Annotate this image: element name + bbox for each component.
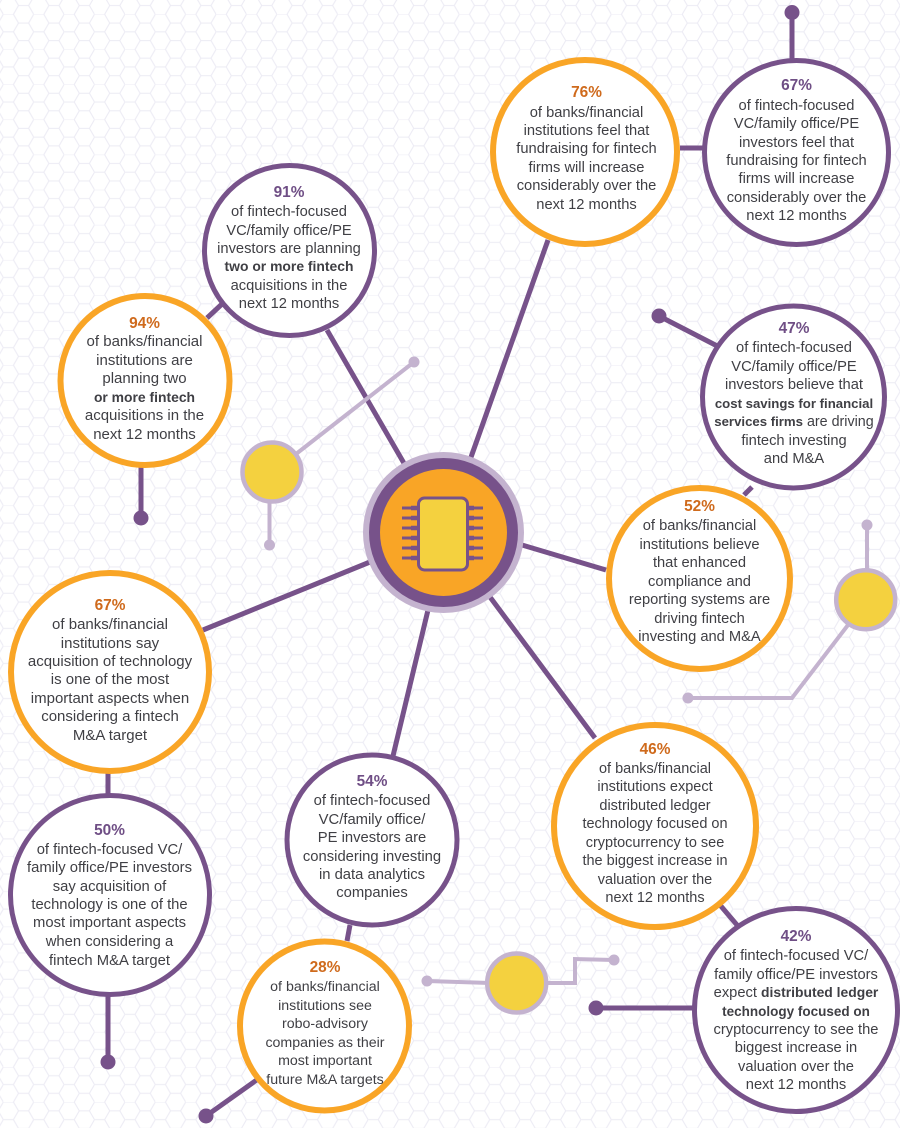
stat: 50% investors technology: 50% <box>94 822 125 839</box>
stat: 42% investors distributed ledger: cryptocurrency to see the <box>714 1022 878 1038</box>
stat: 76% banks fundraising: fundraising for fintech <box>516 141 657 157</box>
stat: 52% banks compliance <box>609 488 790 669</box>
stat: 28% banks robo-advisory: future M&A targets <box>266 1072 384 1088</box>
stat: 91% investors acquisitions: next 12 months <box>239 296 339 312</box>
stat: 50% investors technology: when considering a <box>45 934 174 950</box>
stat: 54% investors data analytics <box>287 755 457 925</box>
stat: 47% investors cost savings: fintech investing <box>741 433 847 449</box>
stat: 47% investors cost savings <box>702 306 884 488</box>
stat: 28% banks robo-advisory: of banks/financial <box>270 979 380 995</box>
stat: 67% banks technology <box>11 573 209 771</box>
stat: 52% banks compliance: 52% <box>684 498 715 515</box>
stat: 52% banks compliance: driving fintech <box>654 611 745 627</box>
stat: 67% investors fundraising: fundraising for fintech <box>726 153 867 169</box>
stat: 47% investors cost savings: VC/family office/PE <box>731 359 857 375</box>
stat: 67% investors fundraising: of fintech-focused <box>739 98 854 114</box>
stat: 67% investors fundraising: considerably over the <box>727 190 866 206</box>
stat: 50% investors technology: of fintech-focused VC/ <box>37 842 183 858</box>
stat: 46% banks distributed ledger: technology focused on <box>582 816 728 832</box>
stat: 50% investors technology: fintech M&A target <box>49 953 170 969</box>
yellow node: bottom <box>422 954 620 1012</box>
stat: 28% banks robo-advisory: companies as their <box>265 1035 385 1051</box>
stat: 50% investors technology: family office/PE investors <box>27 860 192 876</box>
stat: 67% banks technology: M&A target <box>73 727 148 744</box>
stat: 46% banks distributed ledger <box>554 725 756 927</box>
stat: 67% investors fundraising: VC/family office/PE <box>734 116 859 132</box>
stat: 28% banks robo-advisory: robo-advisory <box>282 1016 369 1032</box>
stat: 54% investors data analytics: VC/family office/ <box>319 812 426 828</box>
stat: 76% banks fundraising: considerably over the <box>517 178 656 194</box>
stat: 52% banks compliance: investing and M&A <box>638 629 761 645</box>
stat: 47% investors cost savings: and M&A <box>764 451 824 467</box>
stat: 76% banks fundraising <box>493 60 677 244</box>
stat: 42% investors distributed ledger: valuation over the <box>738 1059 854 1075</box>
stat: 91% investors acquisitions: of fintech-focused <box>231 204 347 220</box>
stat: 67% banks technology: 67% <box>95 597 126 614</box>
stat: 67% banks technology: of banks/financial <box>52 616 168 633</box>
stat: 42% investors distributed ledger: expect distributed ledger <box>714 984 879 1001</box>
stat: 50% investors technology: say acquisition of <box>53 879 167 895</box>
stat: 76% banks fundraising: 76% <box>571 84 602 101</box>
stat: 91% investors acquisitions <box>204 166 374 336</box>
yellow node: right <box>682 520 895 704</box>
stat: 42% investors distributed ledger: biggest increase in <box>735 1040 857 1056</box>
stat: 54% investors data analytics: PE investors are <box>318 830 426 846</box>
stat: 52% banks compliance: compliance and <box>648 574 751 590</box>
yellow node: left <box>242 356 420 550</box>
stat: 67% investors fundraising: investors feel that <box>739 135 854 151</box>
stat: 76% banks fundraising: institutions feel that <box>524 123 649 139</box>
stat: 47% investors cost savings: 47% <box>779 320 810 337</box>
stat: 46% banks distributed ledger: the biggest increase in <box>582 853 728 869</box>
stat: 94% banks acquisitions: acquisitions in the <box>85 407 204 424</box>
stat: 42% investors distributed ledger: next 12 months <box>746 1077 846 1093</box>
stat: 28% banks robo-advisory: most important <box>278 1053 372 1069</box>
stat: 67% banks technology: considering a fintech <box>41 708 179 725</box>
stat: 94% banks acquisitions: 94% <box>129 315 160 332</box>
stat: 52% banks compliance: of banks/financial <box>643 518 756 534</box>
stat: 54% investors data analytics: companies <box>336 885 408 901</box>
stat: 54% investors data analytics: considering investing <box>303 849 441 865</box>
stat: 47% investors cost savings: services firms are driving <box>714 414 874 430</box>
stat: 47% investors cost savings: of fintech-focused <box>736 340 852 356</box>
stat: 91% investors acquisitions: investors are planning <box>217 241 361 257</box>
stat: 94% banks acquisitions: next 12 months <box>93 426 196 443</box>
stat: 46% banks distributed ledger: cryptocurrency to see <box>586 835 724 851</box>
stat: 42% investors distributed ledger: technology focused on <box>722 1004 870 1019</box>
stat: 54% investors data analytics: of fintech-focused <box>314 793 430 809</box>
stat: 50% investors technology: technology is one of the <box>31 897 188 913</box>
stat: 67% investors fundraising: firms will increase <box>739 171 854 187</box>
stat: 94% banks acquisitions <box>60 296 230 465</box>
stat: 42% investors distributed ledger: of fintech-focused VC/ <box>724 948 869 964</box>
stat: 52% banks compliance: that enhanced <box>653 555 746 571</box>
stat: 94% banks acquisitions: or more fintech <box>94 389 195 405</box>
stat: 47% investors cost savings: cost savings for financial <box>715 396 873 411</box>
stat: 54% investors data analytics: 54% <box>357 773 388 790</box>
stat: 46% banks distributed ledger: institutions expect <box>597 779 713 795</box>
stat: 67% banks technology: acquisition of technology <box>28 653 193 670</box>
stat: 67% investors fundraising <box>704 60 888 244</box>
purple connector network <box>100 5 800 1124</box>
stat: 76% banks fundraising: next 12 months <box>536 197 637 213</box>
stat: 67% investors fundraising: 67% <box>781 77 812 94</box>
stat: 50% investors technology: most important aspects <box>33 915 186 931</box>
stat: 67% banks technology: important aspects when <box>31 690 189 707</box>
stat: 52% banks compliance: reporting systems are <box>629 592 770 608</box>
stat: 94% banks acquisitions: institutions are <box>96 352 193 369</box>
stat: 91% investors acquisitions: 91% <box>274 184 305 201</box>
stat: 42% investors distributed ledger: family office/PE investors <box>714 967 878 983</box>
stat: 46% banks distributed ledger: valuation over the <box>598 872 712 888</box>
stat: 46% banks distributed ledger: 46% <box>640 741 671 758</box>
stat: 28% banks robo-advisory: institutions see <box>278 998 372 1014</box>
stat: 67% banks technology: is one of the most <box>51 671 170 688</box>
stat: 94% banks acquisitions: planning two <box>102 370 187 387</box>
stat: 91% investors acquisitions: VC/family office/PE <box>226 223 352 239</box>
stat: 94% banks acquisitions: of banks/financial <box>87 333 202 350</box>
stat: 91% investors acquisitions: acquisitions in the <box>231 278 347 294</box>
stat: 28% banks robo-advisory: 28% <box>310 959 341 976</box>
stat: 46% banks distributed ledger: next 12 months <box>605 890 705 906</box>
stat: 52% banks compliance: institutions believe <box>639 537 760 553</box>
stat: 67% investors fundraising: next 12 months <box>746 208 847 224</box>
stat: 67% banks technology: institutions say <box>61 635 160 652</box>
stat: 42% investors distributed ledger <box>694 908 898 1112</box>
stat: 42% investors distributed ledger: 42% <box>781 928 812 945</box>
stat: 91% investors acquisitions: two or more fintech <box>225 258 353 274</box>
icon: microchip <box>402 498 483 570</box>
stat: 46% banks distributed ledger: of banks/financial <box>599 761 711 777</box>
stat: 76% banks fundraising: firms will increase <box>529 160 644 176</box>
stat: 50% investors technology <box>10 796 210 994</box>
stat: 46% banks distributed ledger: distributed ledger <box>599 798 711 814</box>
stat: 47% investors cost savings: investors believe that <box>725 377 863 393</box>
central hub <box>363 452 524 613</box>
stat: 76% banks fundraising: of banks/financial <box>530 105 643 121</box>
stat: 54% investors data analytics: in data analytics <box>319 867 425 883</box>
stat: 28% banks robo-advisory <box>240 942 409 1110</box>
